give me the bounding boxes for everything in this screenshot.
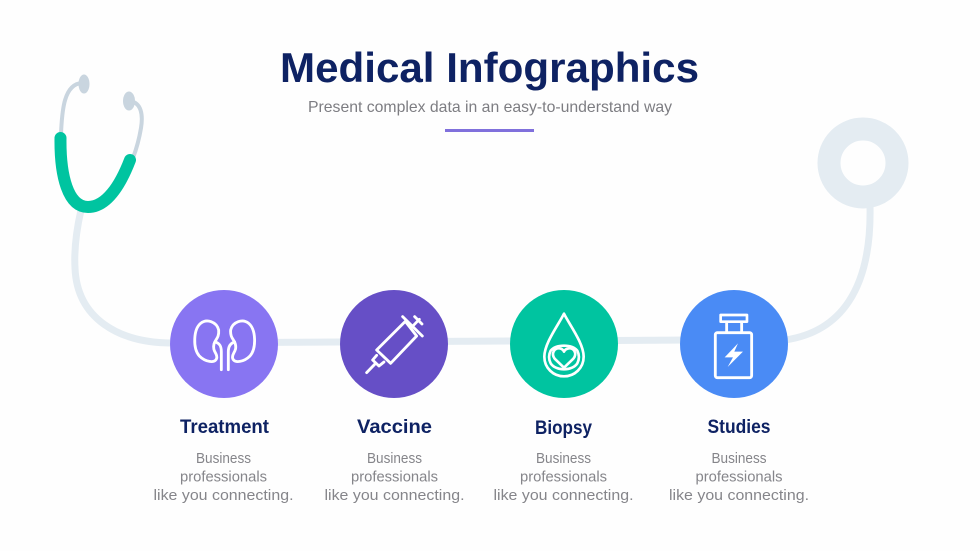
description: like you connecting. [154, 487, 294, 504]
step 1: treatment [154, 290, 294, 504]
blue circle [680, 290, 788, 398]
icon: bottle with bolt [715, 315, 752, 378]
description: professionals [696, 468, 782, 486]
stethoscope green headset tube [60, 138, 130, 207]
description [324, 450, 464, 504]
heading: Treatment [180, 417, 270, 438]
title: Medical Infographics [280, 44, 699, 91]
step 4: studies [669, 290, 809, 504]
description: like you connecting. [324, 487, 464, 504]
icon: syringe [367, 317, 422, 373]
description [494, 450, 634, 504]
heading: Studies [708, 417, 770, 438]
description: like you connecting. [494, 487, 634, 504]
description: professionals [351, 468, 438, 486]
description: Business [536, 450, 591, 467]
description: like you connecting. [669, 487, 809, 504]
purple circle [170, 290, 278, 398]
description: Business [712, 450, 766, 467]
step 2: vaccine [324, 290, 464, 504]
green circle [510, 290, 618, 398]
subtitle: Present complex data in an easy-to-understand way [308, 99, 672, 116]
heading: Vaccine [357, 417, 432, 438]
title underline [445, 129, 534, 132]
description: professionals [180, 468, 267, 486]
description [154, 450, 294, 504]
stethoscope tube [75, 205, 870, 343]
dark purple circle [340, 290, 448, 398]
step 3: biopsy [494, 290, 634, 504]
heading: Biopsy [535, 418, 592, 439]
stethoscope earpieces [61, 74, 142, 158]
description: Business [367, 450, 422, 467]
stethoscope chest piece [829, 129, 897, 197]
description: professionals [520, 468, 607, 486]
icon: blood drop with heart [544, 314, 584, 376]
description [669, 450, 809, 504]
icon: kidneys [195, 321, 255, 370]
description: Business [196, 450, 251, 467]
